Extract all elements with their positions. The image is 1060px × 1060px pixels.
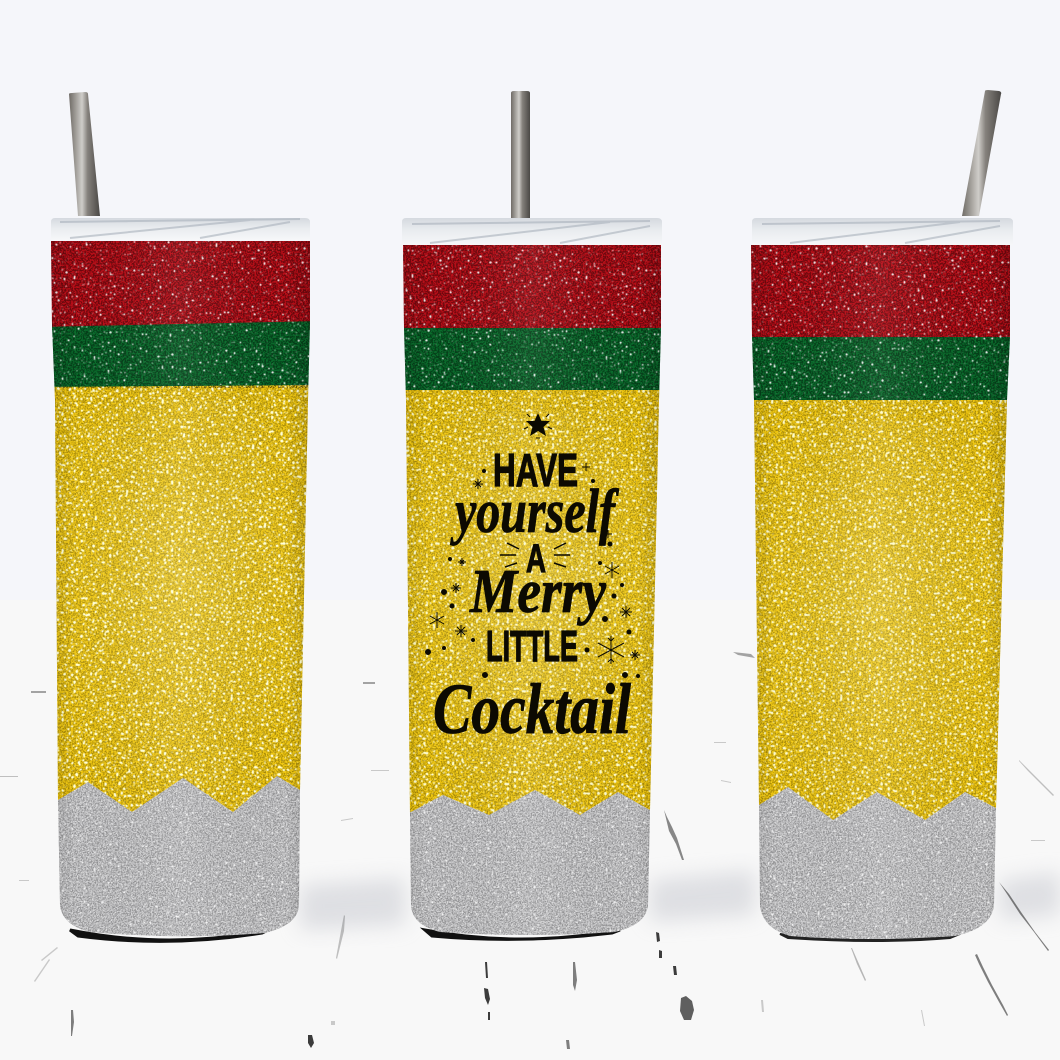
- lid center: [402, 218, 662, 245]
- straw left: [69, 92, 100, 216]
- silver band left: [58, 776, 300, 936]
- green band left: [40, 321, 320, 388]
- silver band center: [410, 790, 650, 935]
- background wall: [0, 0, 1060, 602]
- straw right: [962, 90, 1001, 216]
- rays around A: [500, 543, 570, 567]
- body right: [745, 240, 1020, 945]
- straw center: [511, 91, 530, 218]
- icon: star: [524, 413, 552, 438]
- lid left: [51, 218, 310, 240]
- text: LITTLE: LITTLE: [486, 622, 578, 671]
- text: yourself: yourself: [450, 478, 619, 546]
- yellow band right: [745, 400, 1020, 820]
- design: christmas tree lettering: [426, 413, 640, 749]
- text: HAVE: HAVE: [493, 444, 578, 496]
- silver band right: [759, 787, 996, 939]
- wooden floor: [0, 600, 1060, 1060]
- text: A: A: [526, 537, 546, 581]
- tumbler left: [40, 92, 320, 945]
- green band right: [745, 337, 1020, 400]
- body center: [395, 240, 670, 945]
- green band center: [395, 328, 670, 390]
- lid right: [752, 218, 1013, 245]
- body left: [40, 235, 320, 945]
- yellow band left: [40, 385, 320, 812]
- base shadow right: [780, 934, 960, 941]
- tumbler right: [745, 90, 1020, 945]
- text: Cocktail: Cocktail: [433, 669, 631, 749]
- yellow band center: [395, 390, 670, 815]
- red band left: [51, 241, 310, 330]
- icon: snowflakes and dots: [426, 463, 640, 678]
- base shadow center: [425, 930, 620, 939]
- text: Merry: Merry: [469, 558, 606, 626]
- base shadow left: [70, 930, 268, 941]
- red band center: [403, 245, 661, 330]
- red band right: [751, 245, 1010, 339]
- tumbler center: [395, 91, 670, 945]
